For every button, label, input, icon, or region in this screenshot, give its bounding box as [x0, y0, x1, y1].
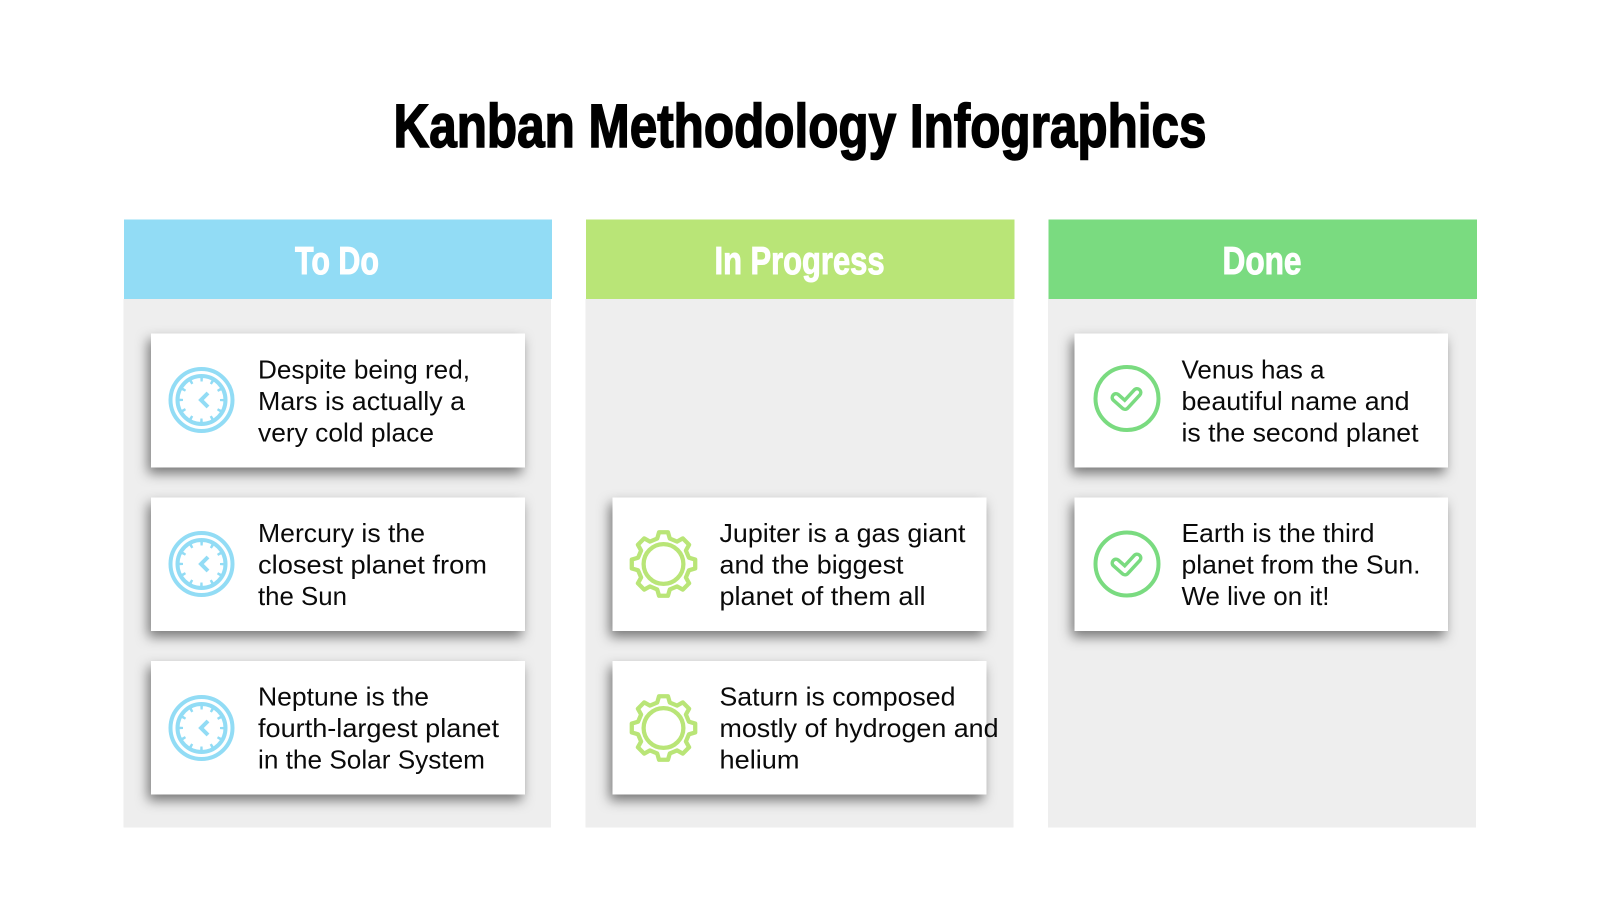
icon: gear	[632, 532, 695, 596]
text: Venus: is the second planet	[1182, 418, 1419, 448]
text: Venus	[1182, 354, 1419, 448]
icon: check circle	[1096, 367, 1158, 430]
text: Earth: We live on it!	[1182, 581, 1330, 611]
card: Mars	[151, 334, 525, 468]
panel background: To Do	[124, 299, 551, 828]
text: Mars: Mars is actually a	[258, 386, 466, 416]
text: Jupiter	[720, 518, 966, 611]
text: Venus: Venus has a	[1182, 354, 1325, 384]
text: Mercury: Mercury is the	[258, 518, 425, 548]
title: Kanban Methodology Infographics	[394, 92, 1206, 160]
header: To Do: To Do	[295, 240, 379, 283]
card: Jupiter	[612, 498, 986, 631]
icon: clock	[170, 533, 232, 595]
text: Jupiter: Jupiter is a gas giant	[720, 518, 966, 548]
text: Jupiter: and the biggest	[720, 550, 904, 580]
text: Mars: very cold place	[258, 418, 434, 448]
text: Mars: Despite being red,	[258, 354, 470, 384]
text: Mars	[258, 354, 470, 448]
text: Neptune: Neptune is the	[258, 682, 429, 712]
text: Jupiter: planet of them all	[720, 581, 926, 611]
panel: To Do	[124, 220, 552, 828]
header: Done: Done	[1222, 240, 1302, 283]
panel: Done	[1048, 220, 1477, 828]
panel: In Progress	[586, 220, 1014, 828]
header: In Progress	[586, 220, 1014, 299]
text: Mercury: closest planet from	[258, 550, 487, 580]
icon: gear	[632, 696, 695, 760]
header: Done	[1048, 220, 1477, 299]
text: Saturn: Saturn is composed	[720, 682, 956, 712]
icon: check circle	[1096, 532, 1158, 596]
text: Saturn: mostly of hydrogen and	[720, 713, 998, 743]
card: Earth	[1074, 498, 1448, 631]
text: Earth: planet from the Sun.	[1182, 550, 1420, 580]
icon: clock	[170, 697, 232, 759]
card: Mercury	[151, 498, 525, 631]
header: To Do	[124, 220, 552, 299]
panel background: Done	[1048, 299, 1476, 828]
card: Neptune	[151, 661, 525, 794]
card: Venus	[1074, 334, 1448, 468]
text: Saturn	[720, 682, 998, 774]
panel background: In Progress	[586, 299, 1014, 828]
text: Neptune	[258, 682, 500, 774]
icon: clock	[170, 369, 232, 431]
text: Saturn: helium	[720, 744, 800, 774]
text: Earth: Earth is the third	[1182, 518, 1374, 548]
text: Neptune: in the Solar System	[258, 744, 485, 774]
card: Saturn	[612, 661, 998, 794]
text: Venus: beautiful name and	[1182, 386, 1410, 416]
text: Earth	[1182, 518, 1420, 611]
text: Mercury: the Sun	[258, 581, 347, 611]
text: Neptune: fourth-largest planet	[258, 713, 500, 743]
text: Mercury	[258, 518, 487, 611]
header: In Progress: In Progress	[714, 240, 884, 283]
